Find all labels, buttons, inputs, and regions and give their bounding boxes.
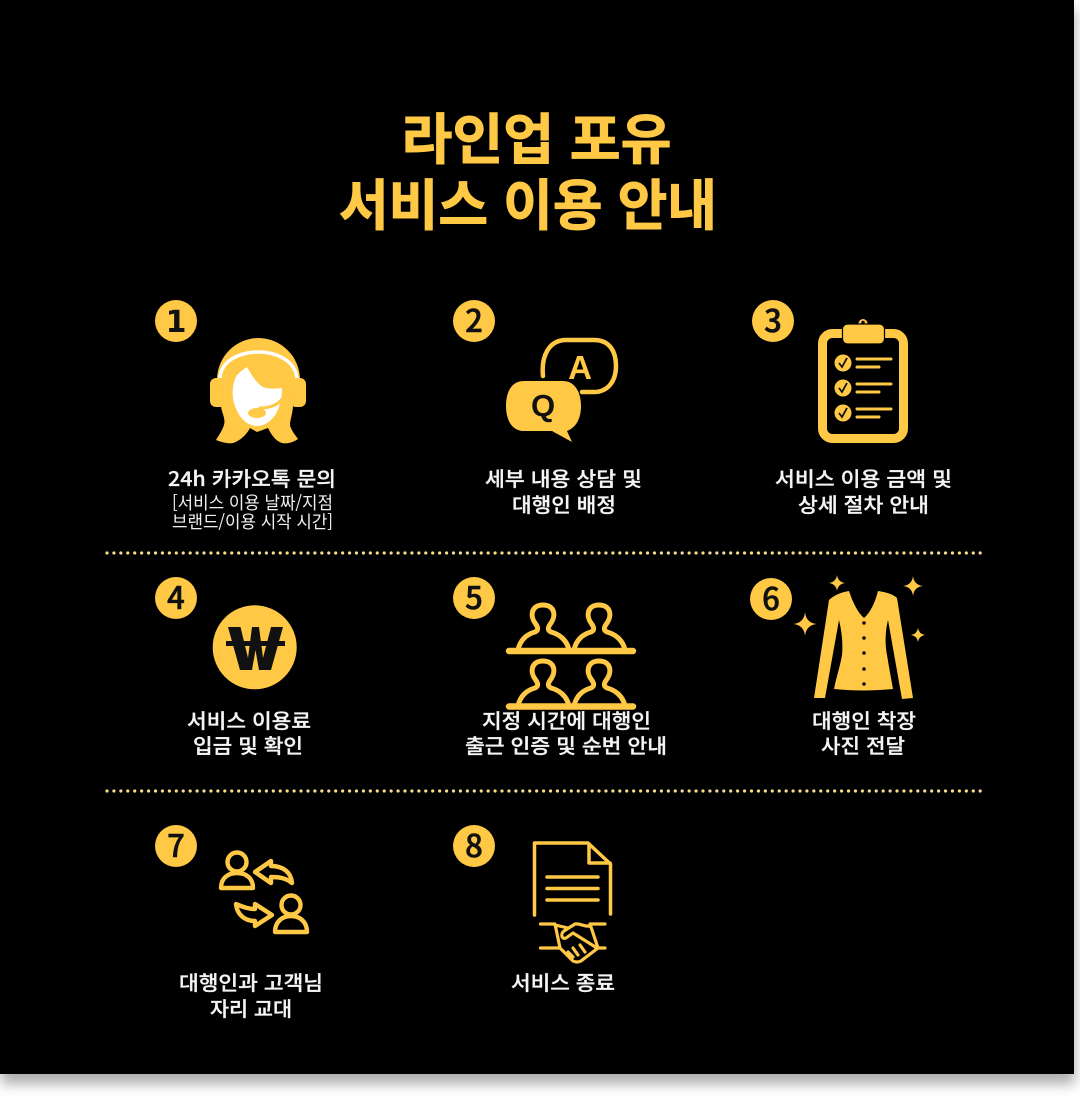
panel: step 7 <box>155 821 323 1022</box>
panel: step 1 <box>155 300 336 534</box>
label 6: 사진 전달 <box>821 730 905 759</box>
number badge 4: 4 <box>167 573 185 618</box>
number badge 8 <box>453 821 495 867</box>
title: 라인업 포유 <box>402 95 672 175</box>
title: 서비스 이용 안내 <box>339 161 717 241</box>
number badge 4 <box>155 573 197 619</box>
icon: staff busts on shelves <box>509 605 633 706</box>
number badge 1: 1 <box>166 305 186 340</box>
number badge 8: 8 <box>465 821 483 866</box>
icon: cardigan with sparkles <box>793 575 925 699</box>
icon: people swapping seats <box>221 852 307 932</box>
number badge 7 <box>155 821 197 867</box>
label 4: 서비스 이용료 <box>187 705 311 734</box>
icon: clipboard checklist <box>822 319 904 438</box>
panel: step 2 <box>453 296 642 518</box>
label 4: 입금 및 확인 <box>193 730 303 759</box>
label 2 <box>485 463 642 518</box>
number badge 2: 2 <box>465 296 483 341</box>
label 7: 대행인과 고객님 <box>179 967 323 996</box>
number badge 1 <box>155 300 197 342</box>
label 3: 상세 절차 안내 <box>798 489 929 518</box>
label 8: 서비스 종료 <box>511 967 615 996</box>
number badge 5: 5 <box>465 573 483 618</box>
number badge 2 <box>453 296 495 342</box>
label 1: [서비스 이용 날짜/지점 <box>172 490 333 515</box>
panel: step 5 <box>453 573 667 759</box>
label 7: 자리 교대 <box>210 993 292 1022</box>
label 4 <box>187 705 311 759</box>
label 2: 대행인 배정 <box>512 489 616 518</box>
label 5: 출근 인증 및 순번 안내 <box>465 730 667 759</box>
label 7 <box>179 967 323 1022</box>
label 1: 브랜드/이용 시작 시간] <box>172 509 333 534</box>
panel: step 3 <box>752 296 952 518</box>
label 6: 대행인 착장 <box>812 705 916 734</box>
icon: won coin <box>213 605 297 689</box>
panel: step 6 <box>750 574 925 759</box>
panel: step 4 <box>155 573 311 759</box>
number badge 3: 3 <box>764 296 782 341</box>
label 6 <box>812 705 916 759</box>
label 3: 서비스 이용 금액 및 <box>775 463 952 492</box>
label 1 <box>168 463 336 534</box>
title <box>339 95 717 241</box>
label 1: 24h 카카오톡 문의 <box>168 463 336 492</box>
icon: Q and A speech bubbles: Q <box>531 388 555 423</box>
label 3 <box>775 463 952 518</box>
label 2: 세부 내용 상담 및 <box>485 463 642 492</box>
panel: step 8 <box>453 821 615 996</box>
icon: Q and A speech bubbles: A <box>568 349 592 386</box>
number badge 7: 7 <box>167 821 185 866</box>
icon: call center agent <box>210 338 306 443</box>
label 5: 지정 시간에 대행인 <box>482 705 651 734</box>
number badge 6: 6 <box>762 574 780 619</box>
label 5 <box>465 705 667 759</box>
icon: Q and A speech bubbles <box>506 340 616 442</box>
icon: document and handshake <box>534 843 610 962</box>
number badge 6 <box>750 574 792 620</box>
number badge 3 <box>752 296 794 342</box>
number badge 5 <box>453 573 495 619</box>
